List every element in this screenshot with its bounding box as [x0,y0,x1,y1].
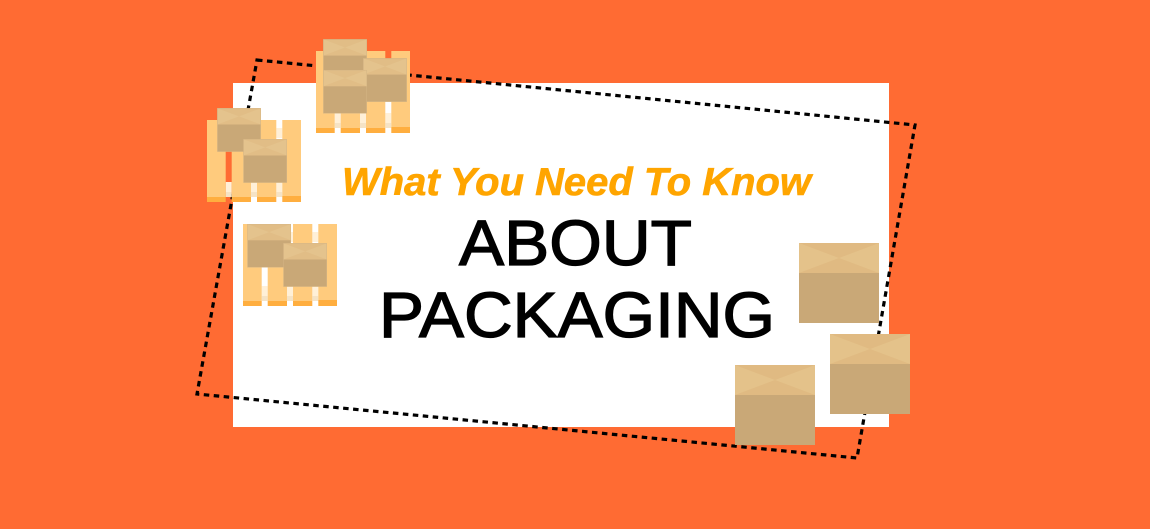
icon: cardboard box, bottom [735,365,815,445]
subtitle: What You Need To Know [342,161,814,204]
icon: cardboard box, right [830,334,910,414]
title [379,207,775,351]
title line: about: ABOUT [459,207,692,279]
dotted tilted frame [197,60,915,458]
icon: pallet with boxes, lower left [243,224,337,306]
white panel [233,83,889,427]
icon: pallet with boxes, top centre [316,39,410,133]
icon: pallet with boxes, upper left [207,108,301,202]
title line: packaging: PACKAGING [379,279,775,351]
icon: cardboard box, upper right [799,243,879,323]
